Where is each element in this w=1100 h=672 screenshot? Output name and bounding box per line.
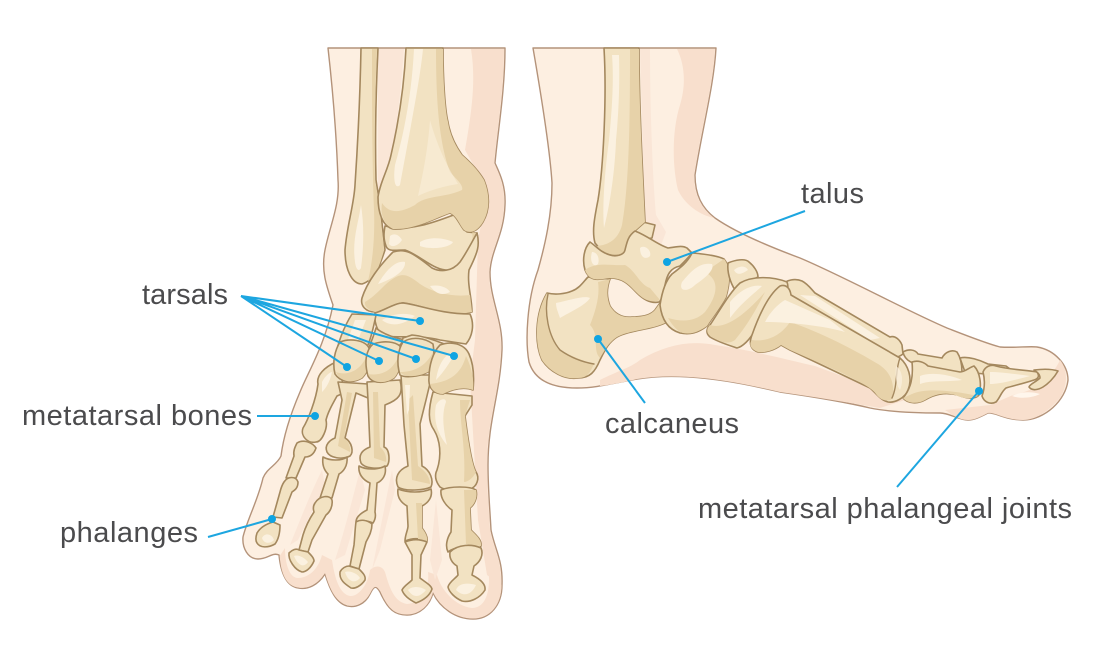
callout line: talus	[663, 211, 805, 266]
side foot top shading	[674, 49, 715, 218]
tarsal: lateral cuneiform upper	[368, 328, 405, 350]
navicular, front view	[375, 303, 473, 344]
callout line: metatarsal bones	[257, 412, 319, 420]
side foot skin outline	[527, 48, 1068, 420]
front foot inter-bone shade	[378, 49, 404, 200]
label: metatarsal bones: metatarsal bones	[22, 400, 252, 432]
panel: side view of foot	[527, 48, 1068, 420]
upper toe phalanges, side view	[903, 350, 1014, 376]
side foot behind-tibia shading	[640, 49, 666, 248]
metatarsal 3	[360, 380, 401, 468]
callout line: calcaneus	[594, 335, 645, 403]
callout line: phalanges	[208, 515, 276, 537]
calcaneus, front view	[362, 233, 478, 314]
front foot toe-tip rim shading	[280, 548, 502, 618]
fibula, front view	[345, 48, 385, 284]
front foot inter-bone shadows	[290, 470, 442, 580]
tarsal: cuboid upper	[335, 314, 376, 362]
panel: front view of foot	[243, 48, 505, 619]
navicular, side view	[660, 253, 729, 334]
tarsal: intermediate cuneiform upper	[400, 335, 448, 360]
metatarsal 1	[429, 392, 478, 490]
fifth toe phalanges	[256, 441, 316, 547]
fibula, side view	[635, 222, 655, 240]
talus, front view	[384, 214, 478, 270]
front foot skin outline	[243, 48, 505, 619]
label: talus: talus	[801, 178, 864, 210]
label: metatarsal phalangeal joints: metatarsal phalangeal joints	[698, 493, 1072, 525]
fourth toe phalanges	[289, 457, 347, 572]
calcaneus, side view	[537, 277, 665, 378]
tarsal bone row	[334, 338, 474, 394]
label: calcaneus: calcaneus	[605, 408, 739, 440]
third toe phalanges	[340, 466, 385, 588]
front foot side shading	[465, 49, 504, 585]
second toe phalanges	[398, 489, 432, 603]
talus, side view	[584, 231, 692, 302]
great toe distal phalanx, side view	[982, 365, 1038, 403]
label: phalanges: phalanges	[60, 517, 198, 549]
metatarsal 2	[396, 375, 432, 490]
callout lines: tarsals	[241, 296, 458, 371]
cuneiform middle, side view	[707, 278, 788, 348]
great toe tip, side view	[1029, 369, 1058, 390]
side foot toe highlight	[1012, 392, 1040, 398]
big toe phalanges	[441, 487, 485, 601]
tibia, side view	[594, 48, 645, 255]
tibia, front view	[378, 48, 488, 232]
side foot sole shading	[600, 343, 905, 408]
callout line: metatarsal phalangeal joints	[897, 387, 983, 487]
first metatarsal, side view	[750, 285, 910, 402]
metatarsal 5	[302, 362, 346, 442]
metatarsal upper, side view	[782, 280, 903, 357]
great toe proximal phalanx, side view	[903, 361, 980, 403]
cuneiform upper, side view	[728, 260, 758, 290]
label: tarsals: tarsals	[142, 279, 228, 311]
side foot toe shading	[945, 360, 1066, 420]
metatarsal 4	[326, 382, 368, 458]
